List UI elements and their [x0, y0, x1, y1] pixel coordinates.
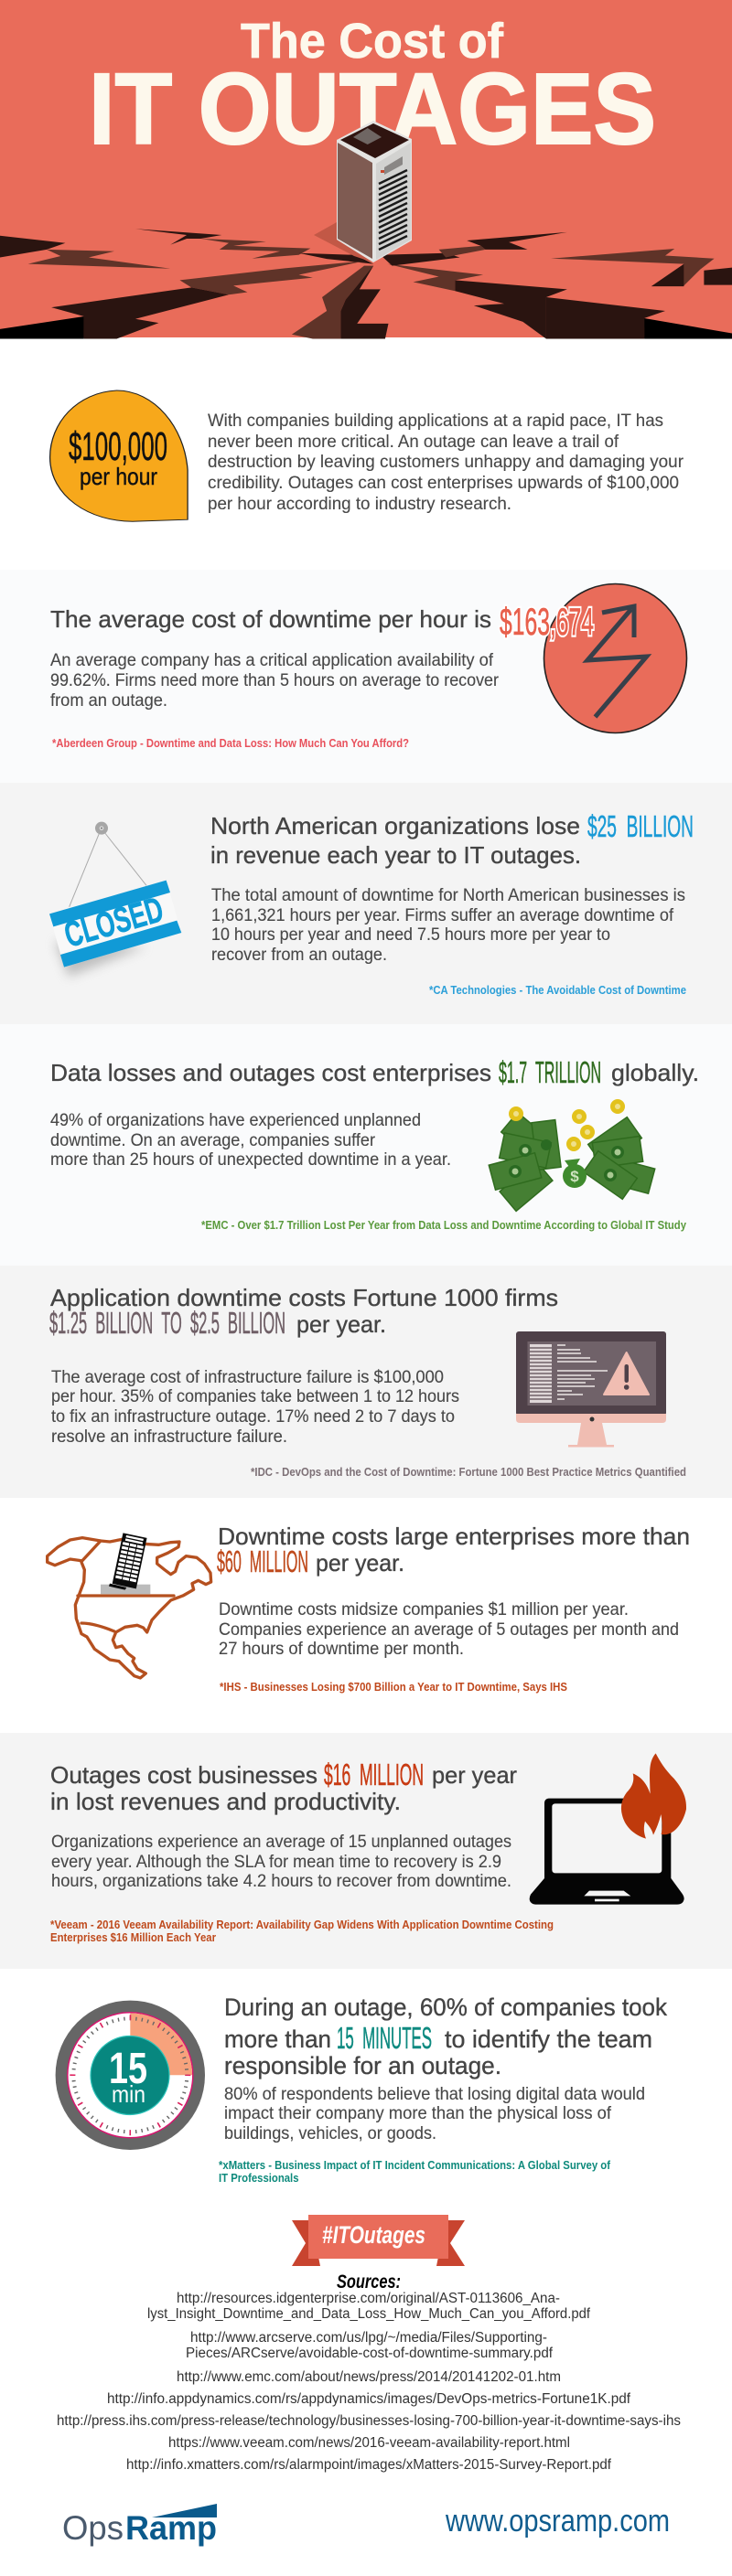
heading: Downtime costs large enterprises more than	[218, 1523, 690, 1550]
heading: The average cost of downtime per hour is	[50, 605, 491, 633]
source: *Aberdeen Group - Downtime and Data Loss: How Much Can You Afford?	[52, 737, 409, 750]
heading	[49, 1284, 558, 1340]
banner: #ITOutages	[292, 2215, 465, 2266]
body text: impact their company more than the physical loss of	[224, 2104, 612, 2123]
body text: more than 25 hours of unexpected downtime in a year.	[50, 1150, 451, 1170]
body text: buildings, vehicles, or goods.	[224, 2124, 436, 2143]
intro text: destruction by leaving customers unhappy and damaging your	[208, 453, 684, 472]
heading: $16 MILLION	[324, 1758, 424, 1791]
sources list: http://press.ihs.com/press-release/technology/businesses-losing-700-billion-year-it-downtime-says-ihs	[57, 2413, 681, 2429]
icon: 15 minute timer: min	[112, 2080, 145, 2108]
panel: North American organizations	[0, 783, 732, 1024]
body text: An average company has a critical application availability of	[50, 651, 494, 670]
heading	[50, 1055, 699, 1089]
sources list: http://www.arcserve.com/us/lpg/~/media/Files/Supporting-	[190, 2330, 547, 2346]
sources list: http://www.emc.com/about/news/press/2014/20141202-01.htm	[177, 2369, 561, 2385]
banner: #ITOutages: #ITOutages	[322, 2221, 425, 2249]
body text: 99.62%. Firms need more than 5 hours on average to recover	[50, 671, 500, 690]
heading: Application downtime costs Fortune 1000 firms	[50, 1284, 558, 1311]
heading: $1.7 TRILLION	[499, 1055, 601, 1089]
body text: recover from an outage.	[211, 946, 387, 965]
intro text: per hour according to industry research.	[208, 495, 511, 514]
source: *IHS - Businesses Losing $700 Billion a Year to IT Downtime, Says IHS	[220, 1681, 567, 1694]
heading: Outages cost businesses	[50, 1761, 318, 1789]
source	[50, 1919, 554, 1944]
body text	[50, 1111, 451, 1170]
body text: to fix an infrastructure outage. 17% need 2 to 7 days to	[51, 1407, 455, 1427]
source: *CA Technologies - The Avoidable Cost of Downtime	[429, 984, 686, 997]
sources list: https://www.veeam.com/news/2016-veeam-availability-report.html	[168, 2435, 570, 2451]
intro text: never been more critical. An outage can leave a trail of	[208, 433, 619, 452]
title line 2: IT OUTAGES	[89, 53, 656, 166]
heading: per year.	[296, 1310, 386, 1338]
icon: money and coins: $	[570, 1168, 579, 1185]
highlight: $163,674: $163,674	[500, 600, 594, 643]
heading	[50, 1758, 517, 1815]
body text: Organizations experience an average of 15 unplanned outages	[51, 1833, 511, 1852]
source: *xMatters - Business Impact of IT Incident Communications: A Global Survey of	[219, 2159, 611, 2172]
panel: large enterprises	[48, 1523, 690, 1694]
heading: 15 MINUTES	[337, 2021, 432, 2055]
sources list: http://resources.idgenterprise.com/original/AST-0113606_Ana-	[177, 2291, 560, 2306]
body text: hours, organizations take 4.2 hours to recover from downtime.	[51, 1872, 511, 1891]
website url: www.opsramp.com	[445, 2504, 670, 2539]
body text	[224, 2085, 645, 2143]
cracks in the ground	[0, 229, 732, 338]
intro text: credibility. Outages can cost enterprises upwards of $100,000	[208, 474, 679, 493]
heading: During an outage, 60% of companies took	[224, 1993, 667, 2021]
badge: $100,000 per hour: $100,000	[69, 424, 167, 469]
source	[219, 2159, 611, 2185]
body text: every year. Although the SLA for mean time to recovery is 2.9	[51, 1853, 501, 1872]
heading: per year	[432, 1761, 517, 1789]
heading: Data losses and outages cost enterprises	[50, 1059, 491, 1086]
icon: money and coins	[489, 1099, 655, 1211]
badge: $100,000 per hour: per hour	[80, 463, 157, 490]
body text: 80% of respondents believe that losing digital data would	[224, 2085, 645, 2104]
icon: closed sign: CLOSED	[60, 890, 167, 956]
icon: 15 minute timer: 15	[109, 2045, 147, 2093]
highlight: $163,674	[500, 600, 594, 643]
panel: outages cost businesses	[0, 1733, 732, 1969]
heading: North American organizations lose	[210, 812, 580, 839]
icon: North America map with building	[48, 1533, 211, 1678]
source: *Veeam - 2016 Veeam Availability Report: Availability Gap Widens With Application Downtime Costing	[50, 1919, 554, 1931]
heading: per year.	[316, 1549, 404, 1577]
body text	[211, 886, 685, 965]
badge: $100,000 per hour	[50, 390, 188, 521]
heading: $60 MILLION	[217, 1545, 308, 1578]
icon: laptop on fire	[530, 1753, 686, 1905]
sources list: http://info.xmatters.com/rs/alarmpoint/images/xMatters-2015-Survey-Report.pdf	[126, 2457, 612, 2473]
sources list	[57, 2271, 681, 2473]
source: *EMC - Over $1.7 Trillion Lost Per Year from Data Loss and Downtime According to Global IT Study	[201, 1219, 686, 1232]
title line 1: The Cost of	[241, 14, 504, 69]
intro text: With companies building applications at a rapid pace, IT has	[208, 412, 663, 431]
body text: from an outage.	[50, 691, 167, 711]
body text: 27 hours of downtime per month.	[219, 1640, 464, 1659]
panel: Fortune 1000	[0, 1266, 732, 1498]
intro text	[208, 412, 684, 514]
icon: 15 minute timer	[56, 2001, 205, 2150]
highlight: $163,674: $163,674	[500, 600, 594, 643]
body text: Companies experience an average of 5 outages per month and	[219, 1620, 679, 1640]
source: IT Professionals	[219, 2172, 299, 2185]
panel: intro	[50, 390, 684, 521]
logo: OpsRamp: Ramp	[125, 2509, 217, 2547]
sources list: http://info.appdynamics.com/rs/appdynamics/images/DevOps-metrics-Fortune1K.pdf	[107, 2391, 631, 2407]
panel: data losses	[0, 1024, 732, 1266]
heading	[210, 809, 694, 869]
heading: in lost revenues and productivity.	[50, 1788, 401, 1815]
source: *IDC - DevOps and the Cost of Downtime: Fortune 1000 Best Practice Metrics Quantified	[251, 1466, 686, 1479]
panel: average cost of downtime	[0, 570, 732, 783]
icon: closed sign	[49, 822, 181, 977]
body text: 10 hours per year and need 7.5 hours more per year to	[211, 925, 610, 945]
body text: downtime. On an average, companies suffer	[50, 1131, 376, 1150]
icon: monitor with warning	[516, 1331, 666, 1447]
heading: more than	[224, 2026, 331, 2053]
panel: 15 minutes	[56, 1993, 667, 2185]
heading	[224, 1993, 667, 2079]
sources list: lyst_Insight_Downtime_and_Data_Loss_How_Much_Can_you_Afford.pdf	[147, 2306, 591, 2322]
body text: 49% of organizations have experienced unplanned	[50, 1111, 421, 1130]
body text: 1,661,321 hours per year. Firms suffer an average downtime of	[211, 906, 674, 925]
heading	[217, 1523, 690, 1578]
heading: to identify the team	[445, 2026, 652, 2053]
sources list: Pieces/ARCserve/avoidable-cost-of-downtime-summary.pdf	[186, 2346, 554, 2361]
heading: in revenue each year to IT outages.	[210, 841, 581, 869]
icon: server rack	[314, 121, 412, 262]
heading: responsible for an outage.	[224, 2052, 501, 2079]
body text: The average cost of infrastructure failure is $100,000	[51, 1368, 444, 1387]
sources list: Sources:	[337, 2271, 401, 2293]
icon: red circle with lightning arrow	[544, 583, 686, 733]
body text	[51, 1368, 459, 1447]
heading: $1.25 BILLION TO $2.5 BILLION	[49, 1306, 285, 1340]
source: Enterprises $16 Million Each Year	[50, 1931, 216, 1944]
panel: hero header	[0, 0, 732, 338]
heading: globally.	[611, 1059, 699, 1086]
body text: resolve an infrastructure failure.	[51, 1427, 287, 1447]
logo: OpsRamp: Ops	[62, 2509, 124, 2547]
body text	[219, 1600, 679, 1659]
body text	[51, 1833, 511, 1891]
body text	[50, 651, 500, 711]
body text: The total amount of downtime for North American businesses is	[211, 886, 685, 905]
logo: OpsRamp	[62, 2504, 217, 2547]
body text: per hour. 35% of companies take between 1 to 12 hours	[51, 1387, 459, 1406]
body text: Downtime costs midsize companies $1 million per year.	[219, 1600, 629, 1619]
